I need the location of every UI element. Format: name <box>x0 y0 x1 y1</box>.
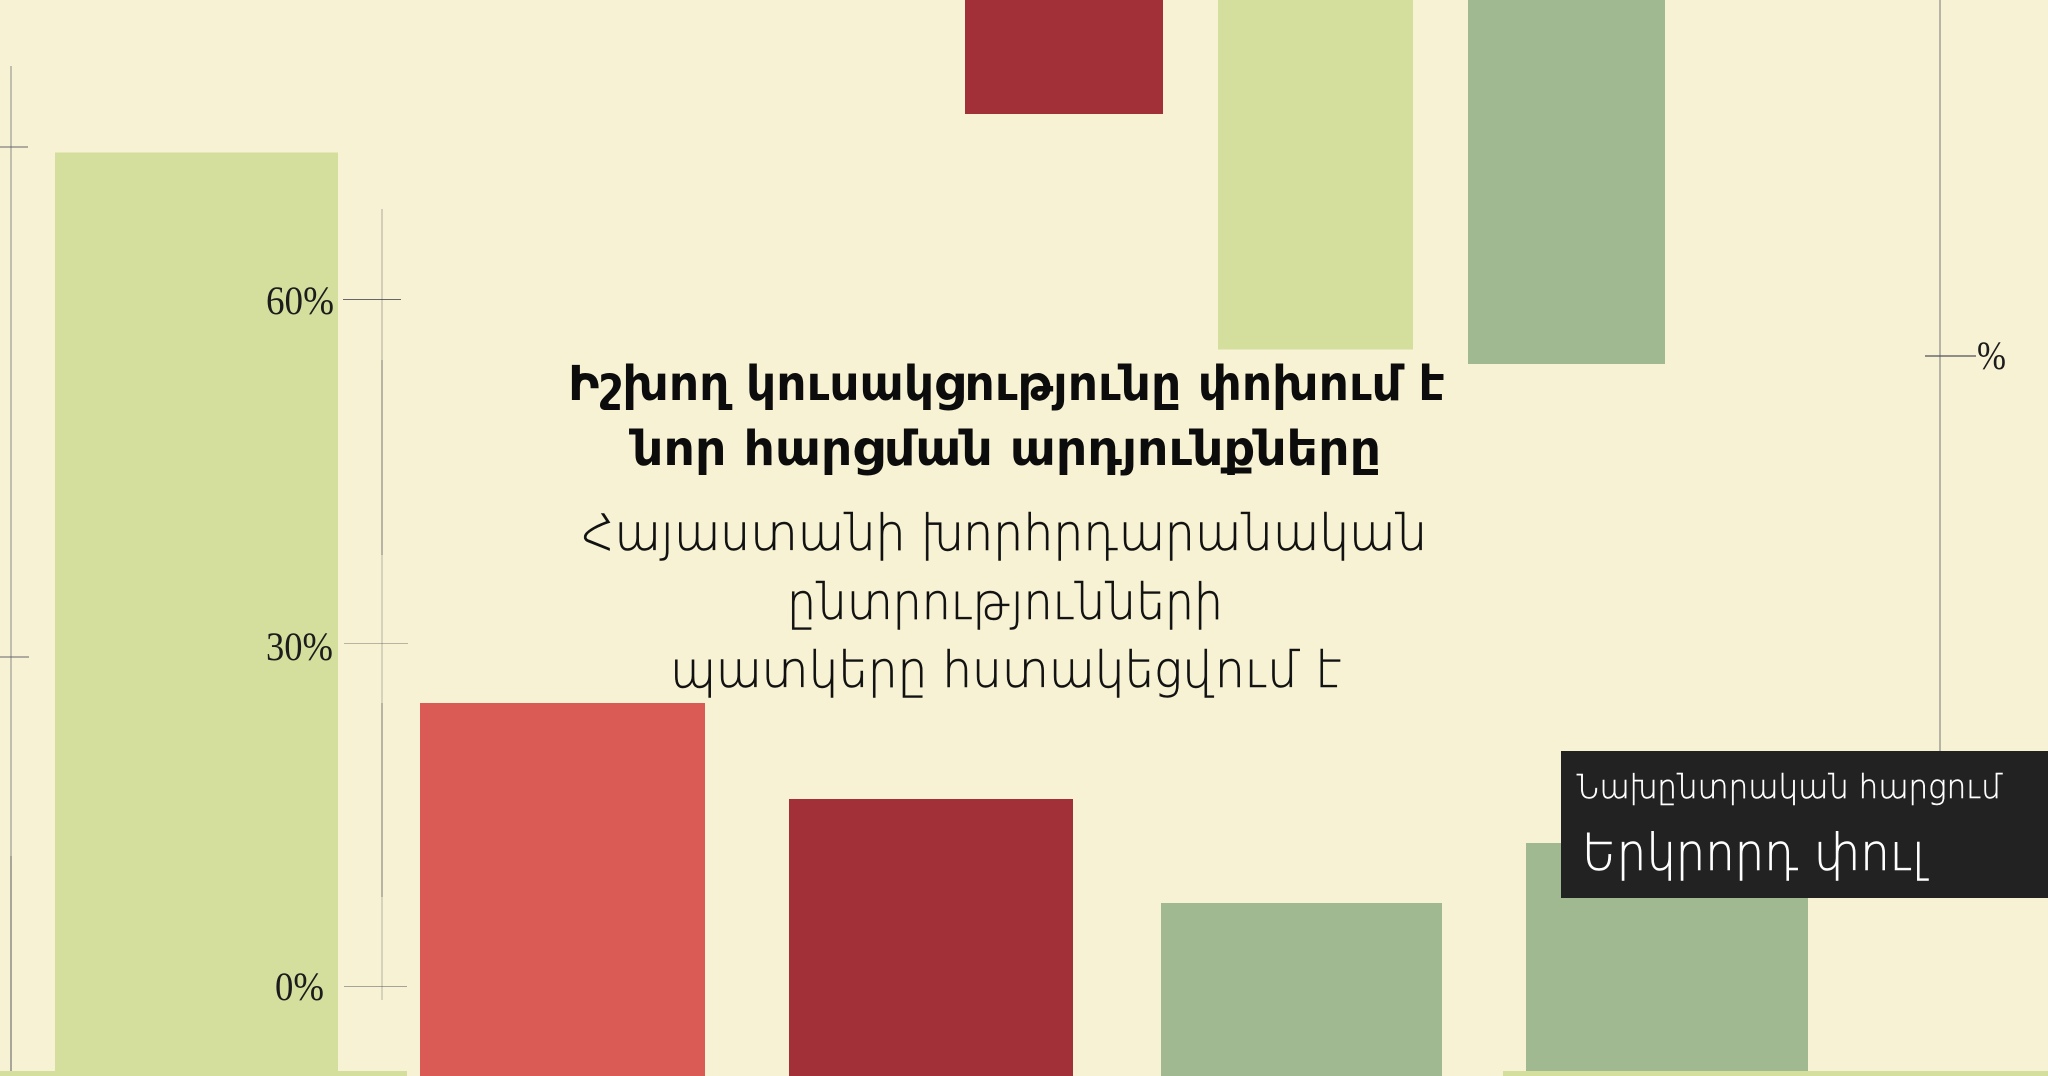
bar: dark red, top <box>965 0 1163 114</box>
subtitle: Հայաստանի խորհրդարանական <box>582 504 1427 562</box>
baseline strip: right <box>1503 1071 2048 1076</box>
title <box>568 356 1445 477</box>
label: second round: Երկրորդ փուլ <box>1582 824 1929 883</box>
label: pre-election poll: Նախընտրական հարցում <box>1576 767 2003 806</box>
label box background <box>1561 751 2048 898</box>
axis label: percent sign: % <box>1977 333 2006 378</box>
axis label: 0%: 0% <box>275 964 324 1009</box>
bar: sage green, bottom right <box>1526 843 1808 1076</box>
axis label: 30%: 30% <box>266 624 333 669</box>
bar: coral red <box>420 703 705 1076</box>
baseline strip: left <box>0 1071 407 1076</box>
title: Իշխող կուսակցությունը փոխում է <box>568 356 1445 412</box>
subtitle: ընտրությունների <box>787 573 1223 631</box>
left axis <box>0 66 29 1071</box>
bar: sage green, top <box>1468 0 1665 364</box>
bar: dark red, bottom <box>789 799 1073 1076</box>
bar: sage green, bottom centre <box>1161 903 1442 1076</box>
subtitle: պատկերը հստակեցվում է <box>670 641 1342 699</box>
subtitle <box>582 504 1427 699</box>
right axis with tick <box>1925 0 1976 751</box>
axis label: 60%: 60% <box>266 278 334 323</box>
bar: light green, top <box>1218 0 1413 350</box>
bar: tall light green, left <box>55 152 338 1076</box>
title: նոր հարցման արդյունքները <box>629 421 1381 477</box>
middle axis with ticks <box>343 209 408 1000</box>
label box: poll round <box>1561 751 2048 898</box>
